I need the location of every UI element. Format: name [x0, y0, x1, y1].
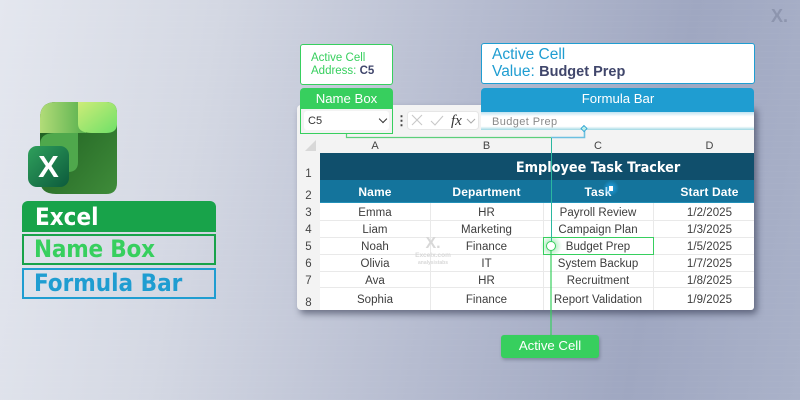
column header C: C — [594, 140, 602, 152]
text: ⋮ — [395, 113, 408, 128]
column header B: B — [483, 140, 490, 152]
watermark: top right logo: X. — [771, 6, 788, 26]
row: Liam: 1/3/2025 — [687, 224, 732, 236]
row: Liam: Marketing — [461, 224, 512, 236]
row number 6: 6 — [305, 258, 312, 270]
name box outline — [300, 108, 393, 134]
label: Excel: Excel — [35, 203, 99, 231]
row: Ava: Ava — [365, 275, 385, 287]
sheet title — [320, 153, 754, 180]
row: Noah: Finance — [466, 241, 507, 253]
row: Liam: Campaign Plan — [558, 224, 638, 236]
tab: Formula Bar — [481, 88, 754, 112]
row: Olivia: Olivia — [360, 258, 390, 270]
row: Ava — [365, 275, 732, 287]
name box field: C5 — [308, 115, 322, 127]
row: Olivia: System Backup — [558, 258, 638, 270]
header: Department: Department — [452, 185, 521, 199]
row number 3: 3 — [305, 207, 312, 219]
tab: Name Box: Name Box — [316, 91, 377, 106]
row: Noah — [361, 241, 732, 253]
row number 4: 4 — [305, 224, 312, 236]
callout: Active Cell Value: Active Cell — [492, 46, 565, 63]
label: Name Box: Name Box — [34, 235, 155, 263]
callout: Active Cell label — [501, 335, 599, 358]
callout: Active Cell Value — [481, 43, 755, 84]
header: Start Date: Start Date — [680, 185, 739, 199]
row number 5: 5 — [305, 241, 312, 253]
row: Sophia: Finance — [466, 294, 507, 306]
row: Sophia — [357, 294, 732, 306]
watermark: center logo: X. — [425, 235, 441, 252]
icon letter: X — [38, 149, 59, 184]
row: Ava: HR — [478, 275, 495, 287]
icon: Excel logo — [28, 102, 117, 194]
header: Name: Name — [358, 185, 392, 199]
callout: Active Cell Address: Address: C5 — [311, 65, 374, 77]
formula controls: fx — [451, 113, 462, 129]
row: Emma: Emma — [358, 207, 392, 219]
row: Noah: 1/5/2025 — [687, 241, 732, 253]
formula controls — [407, 111, 479, 130]
row: Liam — [362, 224, 732, 236]
row: Emma: Payroll Review — [560, 207, 636, 219]
row: Noah: Budget Prep — [566, 241, 630, 253]
row: Ava: Recruitment — [567, 275, 629, 287]
row number 2: 2 — [305, 190, 312, 202]
row: Sophia: 1/9/2025 — [687, 294, 732, 306]
row number 1: 1 — [305, 168, 312, 180]
panel: Excel window — [297, 105, 754, 310]
row: Sophia: Sophia — [357, 294, 393, 306]
row: Olivia — [360, 258, 732, 270]
table header row — [320, 180, 754, 203]
formula bar field — [481, 112, 754, 130]
table body — [320, 203, 754, 310]
row: Emma — [358, 207, 732, 219]
row: Sophia: Report Validation — [554, 294, 642, 306]
column header A: A — [371, 140, 379, 152]
callout: Active Cell label: Active Cell — [519, 338, 581, 353]
row: Liam: Liam — [362, 224, 388, 236]
label: Formula Bar — [22, 268, 216, 299]
formula bar field: Budget Prep — [492, 116, 558, 128]
header: Task: Task — [584, 185, 612, 199]
row number 8: 8 — [305, 297, 312, 309]
watermark: center logo: analysistabs — [418, 260, 448, 266]
label: Name Box — [22, 234, 216, 265]
row: Ava: 1/8/2025 — [687, 275, 732, 287]
label: Excel — [22, 201, 216, 232]
row: Emma: 1/2/2025 — [687, 207, 732, 219]
callout: Active Cell Value: Value: Budget Prep — [492, 63, 625, 80]
select-all corner — [305, 140, 316, 151]
tab: Name Box — [300, 88, 393, 109]
row: Olivia: 1/7/2025 — [687, 258, 732, 270]
row: Olivia: IT — [481, 258, 492, 270]
callout: Active Cell Address — [300, 44, 393, 85]
row: Emma: HR — [478, 207, 495, 219]
watermark: center logo: Excelx.com — [415, 252, 451, 259]
callout: Active Cell Address: Active Cell — [311, 52, 365, 64]
watermark: center logo — [415, 235, 451, 266]
sheet title: Employee Task Tracker — [516, 160, 680, 176]
column header D: D — [706, 140, 713, 152]
row number 7: 7 — [305, 275, 312, 287]
active cell highlight — [543, 237, 654, 255]
tab: Formula Bar: Formula Bar — [582, 91, 654, 106]
name box field — [304, 111, 389, 130]
label: Formula Bar: Formula Bar — [34, 269, 182, 297]
row: Noah: Noah — [361, 241, 389, 253]
